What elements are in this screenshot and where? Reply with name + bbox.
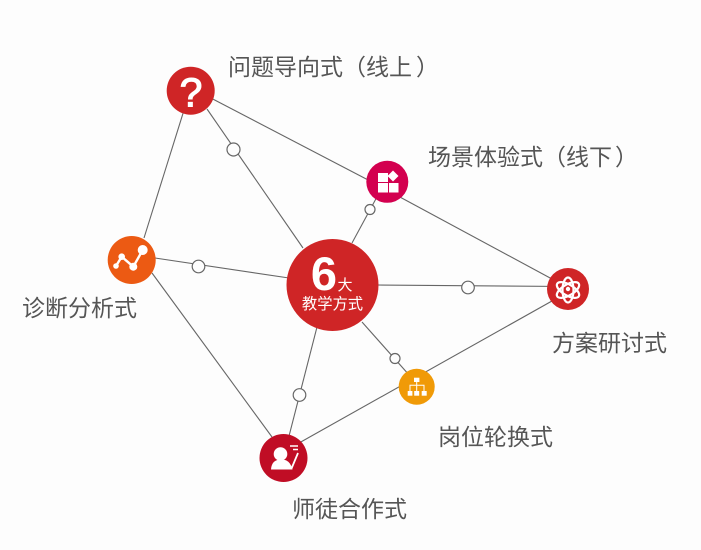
- center hub: 6大教学方式: 大: [337, 277, 353, 294]
- center hub: 6大教学方式: [286, 239, 378, 331]
- label: 方案研讨式: 方案研讨式: [552, 330, 667, 356]
- icon: trend line: [108, 236, 156, 284]
- icon: blocks: [366, 161, 408, 203]
- label: 诊断分析式: 诊断分析式: [22, 295, 137, 321]
- label: 问题导向式（线上）: 问题导向式（线上）: [228, 54, 439, 80]
- network connecting lines: [144, 91, 568, 452]
- link nodes: [192, 143, 474, 401]
- center hub: 6大教学方式: 6: [311, 247, 337, 300]
- icon: org chart: [399, 369, 435, 405]
- label: 岗位轮换式: 岗位轮换式: [438, 424, 553, 450]
- center hub: 6大教学方式: 教学方式: [302, 296, 363, 313]
- icon: question mark: [167, 67, 215, 116]
- icon: question mark: ?: [180, 70, 202, 116]
- label: 师徒合作式: 师徒合作式: [292, 496, 407, 522]
- icon: atom: [547, 268, 589, 310]
- label: 场景体验式（线下）: 场景体验式（线下）: [428, 144, 638, 170]
- icon: teacher: [260, 434, 308, 482]
